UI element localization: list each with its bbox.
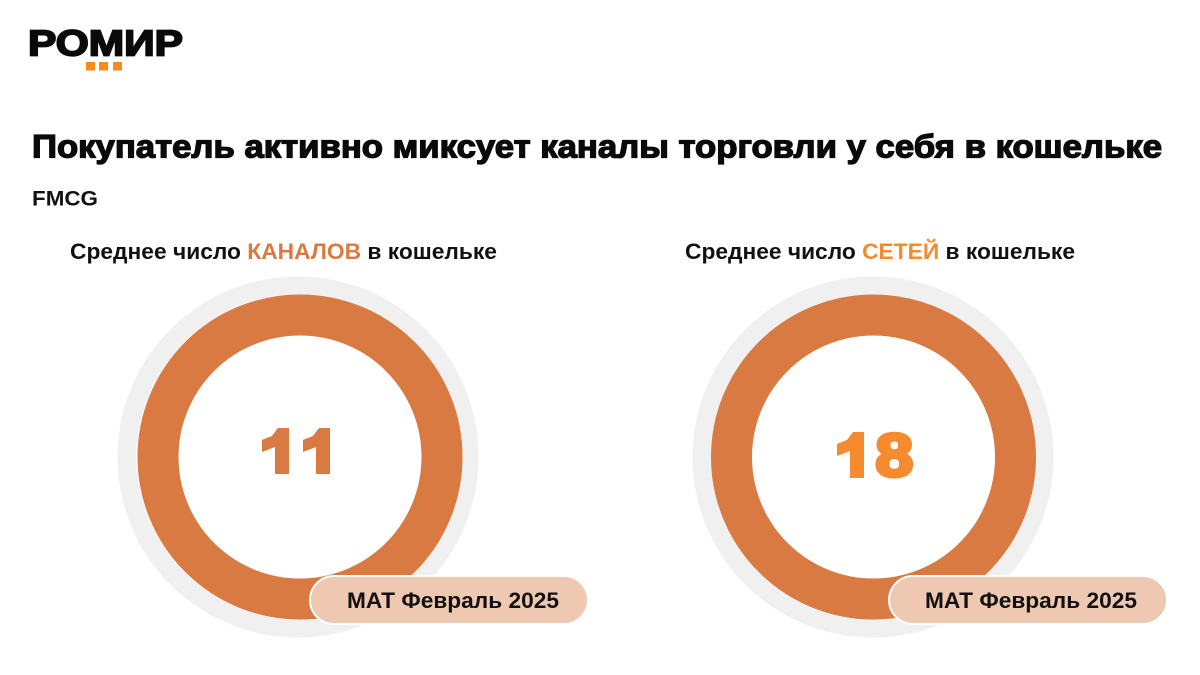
- heading: average chains: Среднее число СЕТЕЙ в кошельке: [685, 239, 1075, 264]
- donut: channels: [127, 286, 469, 628]
- panel: chains: [685, 239, 1167, 628]
- value: 18: 1: [825, 422, 878, 489]
- title: Покупатель активно миксует каналы торговли у себя в кошельке: [32, 128, 1162, 164]
- panel: channels: [70, 239, 588, 628]
- value: 11: 1: [250, 418, 303, 485]
- heading: average channels: Среднее число КАНАЛОВ в кошельке: [70, 239, 497, 264]
- donut: chains: [702, 286, 1044, 628]
- logo: ROMIR: РОМИР: [28, 22, 183, 64]
- value: 18: [837, 432, 914, 478]
- value: 11: [262, 428, 330, 474]
- badge: MAT February 2025: [889, 576, 1167, 624]
- value: 18: 8: [876, 422, 913, 489]
- subtitle: FMCG: FMCG: [32, 186, 98, 210]
- badge: MAT February 2025: [310, 576, 588, 624]
- badge: MAT February 2025: МАТ Февраль 2025: [347, 588, 559, 613]
- value: 11: 1: [291, 418, 344, 485]
- badge: MAT February 2025: МАТ Февраль 2025: [925, 588, 1137, 613]
